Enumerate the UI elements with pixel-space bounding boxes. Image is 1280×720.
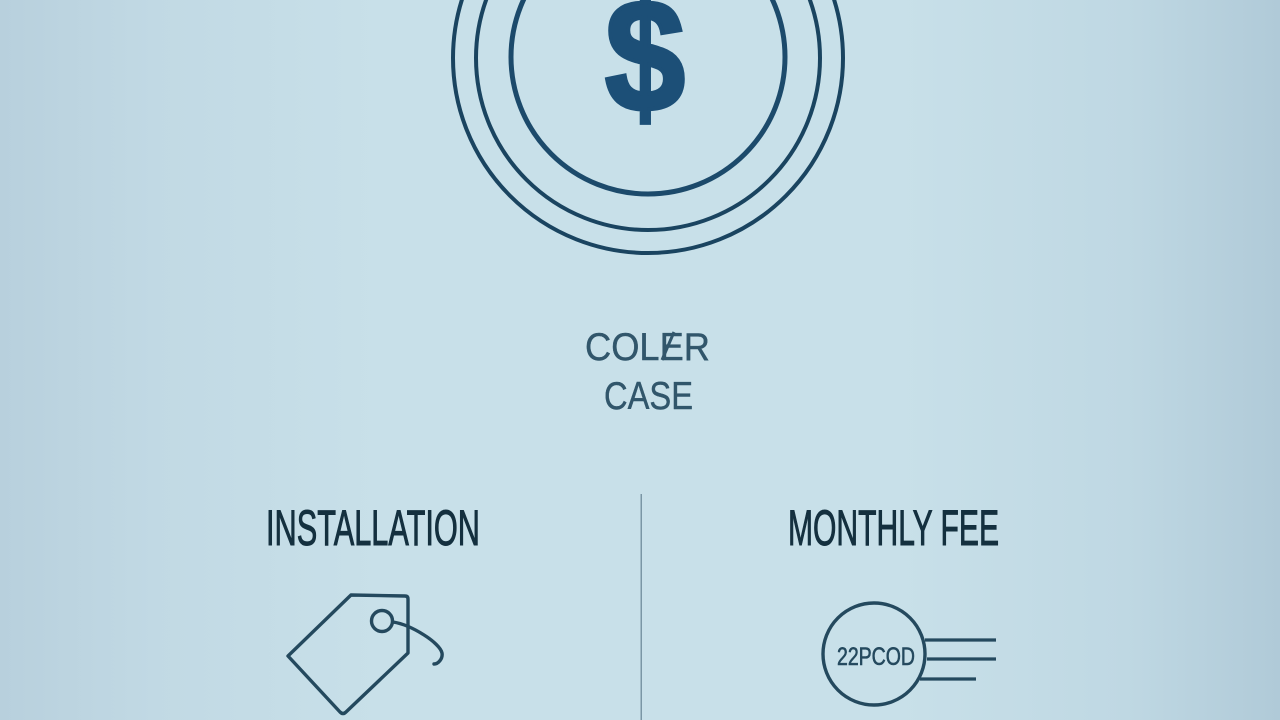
icon: monthly fee circle with lines: 22PCOD	[837, 643, 915, 671]
icon: concentric coin rings with dollar sign	[453, 0, 843, 253]
divider	[640, 494, 642, 720]
heading: installation: INSTALLATION	[266, 500, 480, 556]
heading: center label	[585, 326, 710, 418]
icon: monthly fee circle with lines	[823, 603, 996, 705]
heading: center label: COLER	[585, 326, 710, 369]
heading: monthly fee: MONTHLY FEE	[788, 500, 999, 556]
heading: center label: CASE	[604, 375, 693, 418]
icon: price tag	[288, 595, 442, 714]
